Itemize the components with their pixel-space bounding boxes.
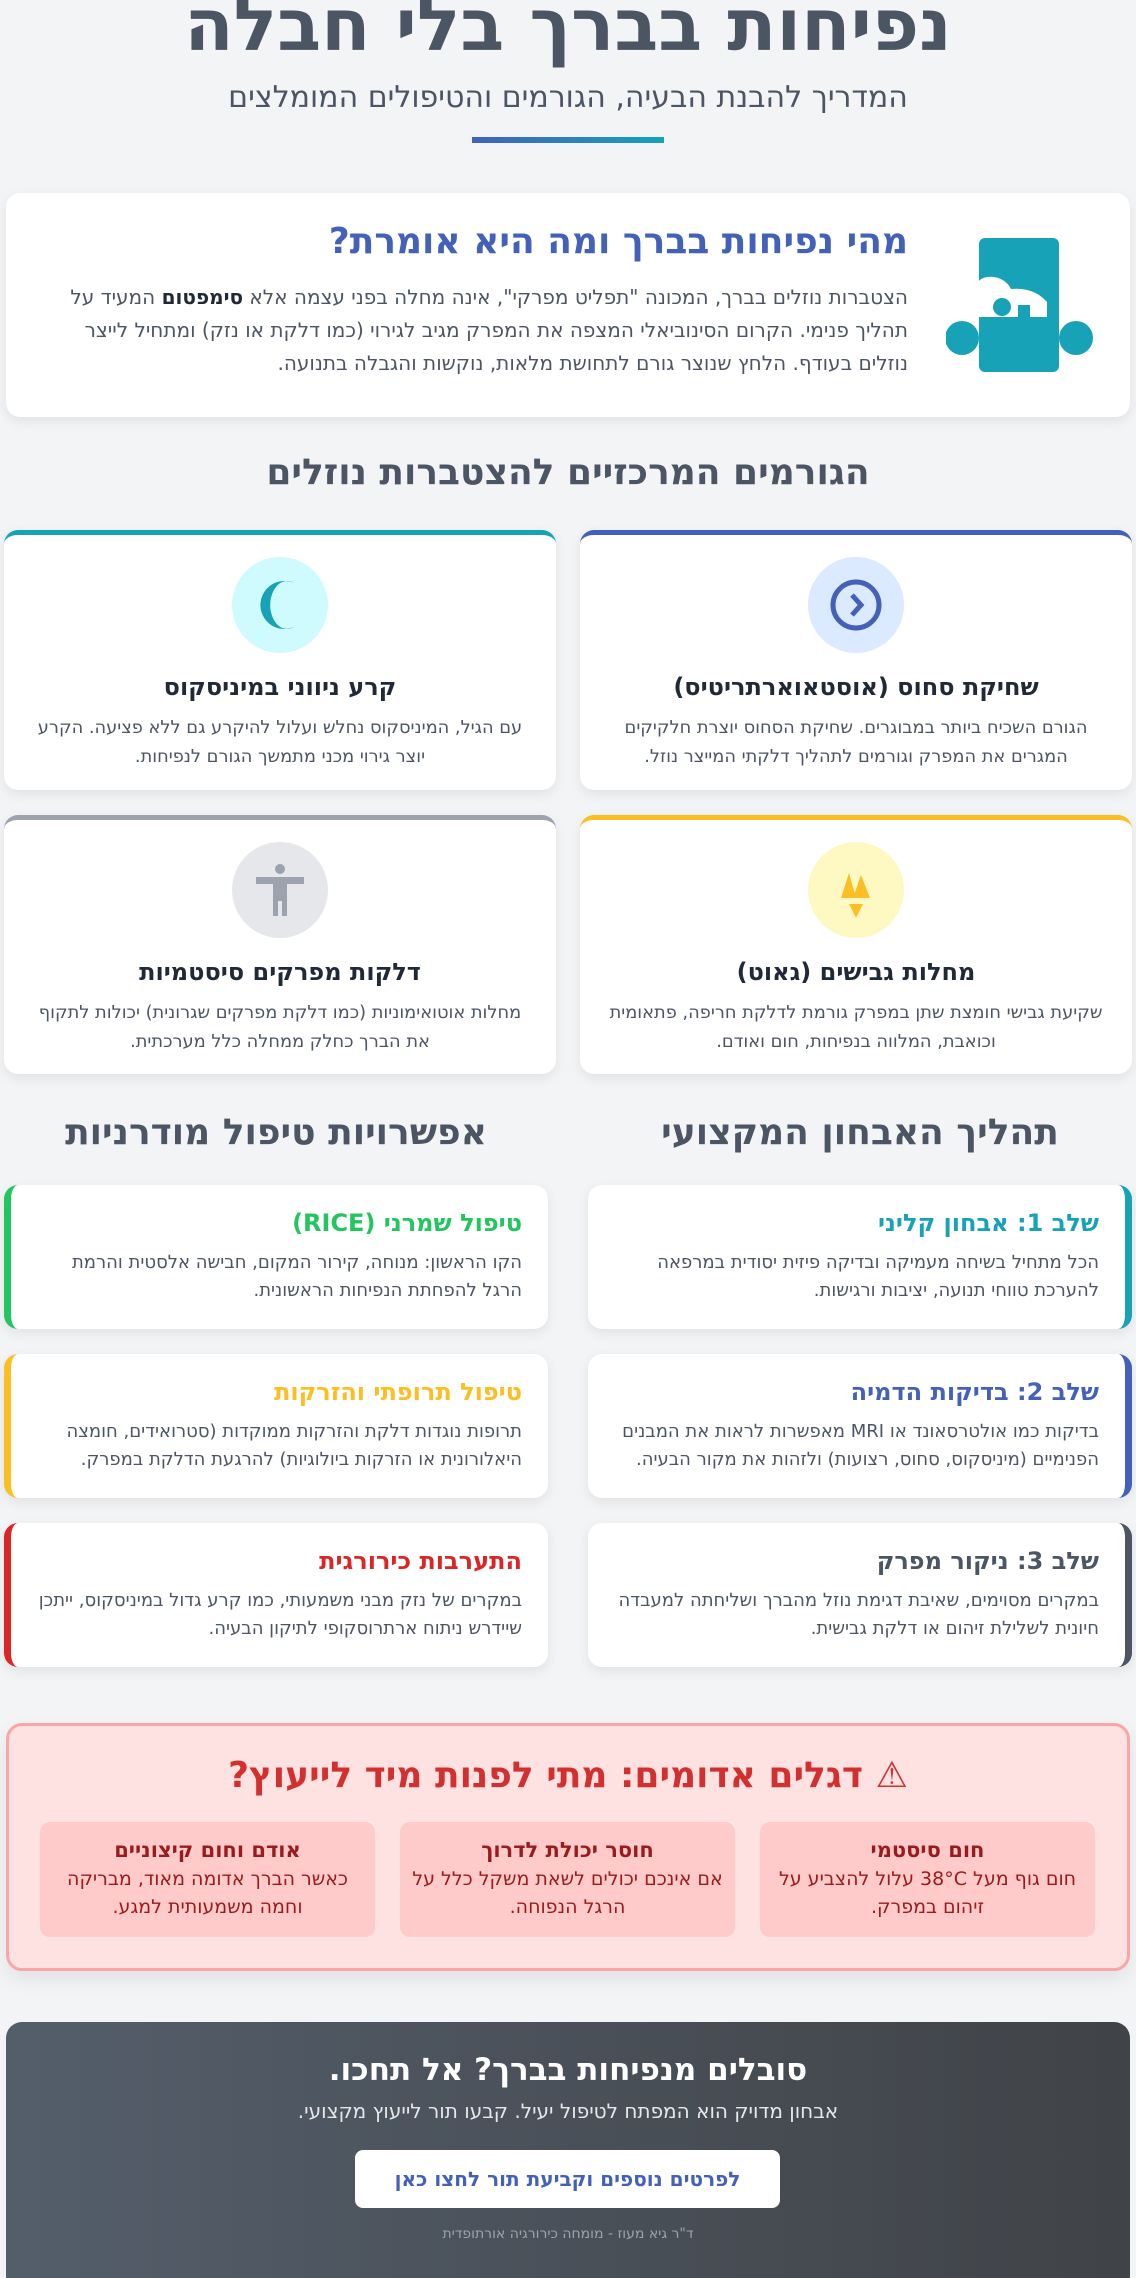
flag: weight: חוסר יכולת לדרוך [481, 1838, 654, 1862]
panel: treatment meds: טיפול תרופתי והזרקות [274, 1378, 522, 1406]
heading: treatment: אפשרויות טיפול מודרניות [65, 1112, 487, 1153]
icon: person [232, 842, 328, 938]
panel: cause systemic: מחלות אוטואימוניות (כמו דלקת מפרקים שגרונית) יכולות לתקוף את הברך כחלק ממחלה כלל מערכתית. [39, 1002, 521, 1052]
icon: knee [946, 238, 1093, 372]
panel: cause meniscus: קרע ניווני במיניסקוס [164, 673, 396, 701]
title underline [472, 137, 664, 143]
panel: cause osteoarthritis: שחיקת סחוס (אוסטאוארתריטיס) [673, 673, 1039, 701]
red flags heading: ⚠ דגלים אדומים: מתי לפנות מיד לייעוץ? [228, 1755, 908, 1796]
CTA heading: סובלים מנפיחות בברך? אל תחכו. [329, 2052, 807, 2088]
CTA button: לפרטים נוספים וקביעת תור לחצו כאן [395, 2167, 740, 2191]
flag: weight: אם אינכם יכולים לשאת משקל כלל על הרגל הנפוחה. [412, 1868, 723, 1918]
icon: crescent [232, 557, 328, 653]
panel: step 2: שלב 2: בדיקות הדמיה [851, 1378, 1099, 1406]
icon: crystals [808, 842, 904, 938]
CTA button [355, 2150, 780, 2208]
panel: cause systemic [4, 815, 556, 1074]
flag: redness [40, 1822, 375, 1937]
panel: step 1: הכל מתחיל בשיחה מעמיקה ובדיקה פיזית יסודית במרפאה להערכת טווחי תנועה, יציבות ורגישות. [657, 1252, 1099, 1301]
panel: treatment RICE: הקו הראשון: מנוחה, קירור המקום, חבישה אלסטית והרמת הרגל להפחתת הנפיחות הראשונית. [72, 1252, 522, 1301]
intro paragraph: הצטברות נוזלים בברך, המכונה "תפליט מפרקי", אינה מחלה בפני עצמה אלא סימפטום המעיד על תהליך פנימי. הקרום הסינוביאלי המצפה את המפרק מגיב לגירוי (כמו דלקת או נזק) ומתחיל לייצר נוזלים בעודף. הלחץ שנוצר גורם לתחושת מלאות, נוקשות והגבלה בתנועה. [70, 285, 908, 375]
panel: red flags [6, 1723, 1130, 1971]
panel: treatment RICE: טיפול שמרני (RICE) [292, 1209, 522, 1237]
panel: cause meniscus [4, 530, 556, 790]
panel: cause systemic: דלקות מפרקים סיסטמיות [139, 958, 421, 986]
flag: fever [760, 1822, 1095, 1937]
panel: cause meniscus: עם הגיל, המיניסקוס נחלש ועלול להיקרע גם ללא פציעה. הקרע יוצר גירוי מכני מתמשך הגורם לנפיחות. [38, 717, 522, 767]
icon: circle arrow [808, 557, 904, 653]
panel: step 1 [588, 1185, 1132, 1329]
CTA text: אבחון מדויק הוא המפתח לטיפול יעיל. קבעו תור לייעוץ מקצועי. [298, 2099, 838, 2123]
panel: step 2: בדיקות כמו אולטרסאונד או MRI מאפשרות לראות את המבנים הפנימיים (מיניסקוס, סחוס, רצועות) ולזהות את מקור הבעיה. [622, 1421, 1099, 1470]
panel: treatment meds [4, 1354, 548, 1498]
panel: treatment RICE [4, 1185, 548, 1329]
flag: fever: חום סיסטמי [871, 1838, 984, 1862]
panel: step 3: שלב 3: ניקור מפרק [877, 1547, 1099, 1575]
flag: redness: כאשר הברך אדומה מאוד, מבריקה וחמה משמעותית למגע. [67, 1868, 348, 1918]
panel: step 1: שלב 1: אבחון קליני [878, 1209, 1099, 1237]
footer credit: ד"ר גיא מעוז - מומחה כירורגיה אורתופדית [442, 2226, 694, 2242]
panel: cause gout [580, 815, 1132, 1074]
panel: treatment surgery [4, 1523, 548, 1667]
panel: step 3 [588, 1523, 1132, 1667]
panel: CTA [6, 2022, 1130, 2278]
heading: causes: הגורמים המרכזיים להצטברות נוזלים [266, 452, 870, 493]
panel: cause osteoarthritis [580, 530, 1132, 790]
subtitle: המדריך להבנת הבעיה, הגורמים והטיפולים המומלצים [228, 80, 908, 115]
panel: cause osteoarthritis: הגורם השכיח ביותר במבוגרים. שחיקת הסחוס יוצרת חלקיקים המגרים את המפרק וגורמים לתהליך דלקתי המייצר נוזל. [625, 717, 1087, 767]
panel: intro [6, 193, 1130, 417]
panel: cause gout: שקיעת גבישי חומצת שתן במפרק גורמת לדלקת חריפה, פתאומית וכואבת, המלווה בנפיחות, חום ואודם. [610, 1002, 1102, 1052]
flag: fever: חום גוף מעל 38°C עלול להצביע על זיהום במפרק. [779, 1868, 1076, 1918]
panel: treatment surgery: במקרים של נזק מבני משמעותי, כמו קרע גדול במיניסקוס, ייתכן שיידרש ניתוח ארתרוסקופי לתיקון הבעיה. [39, 1590, 522, 1639]
panel: treatment surgery: התערבות כירורגית [319, 1547, 522, 1575]
panel: treatment meds: תרופות נוגדות דלקת והזרקות ממוקדות (סטרואידים, חומצה היאלורונית או הזרקות ביולוגיות) להרגעת הדלקת במפרק. [66, 1421, 522, 1470]
heading: diagnosis: תהליך האבחון המקצועי [661, 1112, 1059, 1153]
panel: cause gout: מחלות גבישים (גאוט) [737, 958, 975, 986]
intro heading: מהי נפיחות בברך ומה היא אומרת? [329, 221, 908, 262]
panel: step 3: במקרים מסוימים, שאיבת דגימת נוזל מהברך ושליחתה למעבדה חיונית לשלילת זיהום או דלקת גבישית. [619, 1590, 1099, 1639]
panel: step 2 [588, 1354, 1132, 1498]
flag: weight [400, 1822, 735, 1937]
flag: redness: אודם וחום קיצוניים [114, 1838, 301, 1862]
